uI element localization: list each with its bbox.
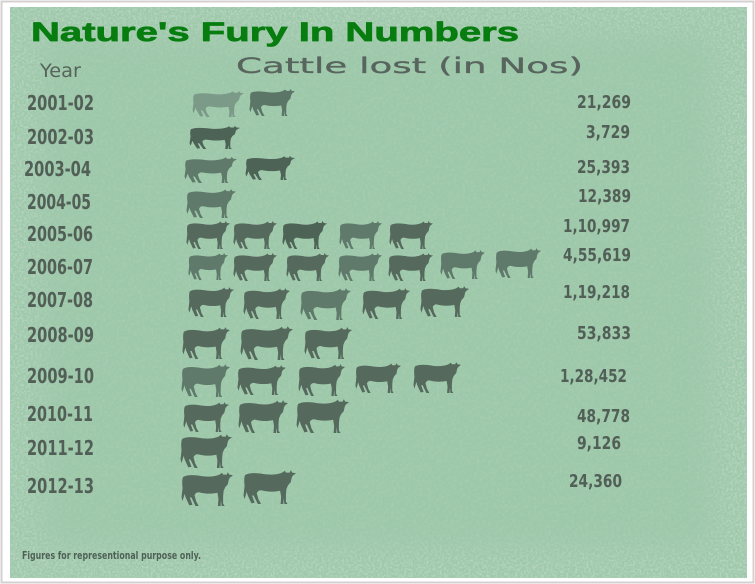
year labels: 2012-13 (27, 474, 94, 498)
value labels: 48,778 (577, 406, 630, 427)
pictogram chart: cattle icons (181, 89, 541, 506)
year labels: 2009-10 (27, 364, 94, 388)
year labels: 2006-07 (27, 255, 93, 279)
icons: 2009-10 (181, 362, 461, 397)
icons: 2005-06 (186, 221, 433, 249)
icons: 2004-05 (186, 189, 236, 218)
year labels: 2004-05 (27, 190, 91, 214)
icons: 2006-07 (188, 248, 541, 281)
year labels: 2003-04 (24, 157, 91, 181)
title: Nature's Fury In Numbers (31, 17, 519, 47)
footnote: Figures for representional purpose only. (22, 549, 201, 562)
heading: year column: Year (39, 60, 81, 82)
year labels: 2010-11 (27, 402, 93, 426)
icons: 2008-09 (182, 326, 352, 360)
icons: 2011-12 (181, 434, 232, 468)
icons: 2012-13 (182, 470, 296, 506)
icons: 2010-11 (183, 399, 349, 433)
year labels: 2008-09 (27, 323, 94, 347)
value labels: 4,55,619 (563, 245, 631, 266)
year labels: 2005-06 (27, 222, 93, 246)
value labels: 21,269 (577, 92, 631, 113)
value labels: 25,393 (577, 157, 630, 178)
value labels: 9,126 (577, 433, 621, 454)
value labels: 53,833 (577, 323, 631, 344)
icons: 2003-04 (185, 156, 295, 183)
value labels: 1,10,997 (563, 216, 630, 237)
icons: 2002-03 (190, 126, 240, 149)
year labels (24, 91, 94, 498)
year labels: 2001-02 (27, 91, 94, 115)
value labels: 24,360 (569, 471, 622, 492)
icons: 2007-08 (188, 286, 469, 320)
icons: 2001-02 (193, 89, 295, 117)
value labels: 1,19,218 (563, 282, 630, 303)
value labels: 1,28,452 (560, 366, 627, 387)
year labels: 2011-12 (27, 436, 94, 460)
year labels: 2002-03 (27, 125, 94, 149)
value labels (560, 92, 631, 492)
value labels: 3,729 (586, 122, 630, 143)
value labels: 12,389 (578, 186, 631, 207)
heading: cattle lost: Cattle lost (in Nos) (236, 54, 583, 78)
year labels: 2007-08 (27, 288, 93, 312)
